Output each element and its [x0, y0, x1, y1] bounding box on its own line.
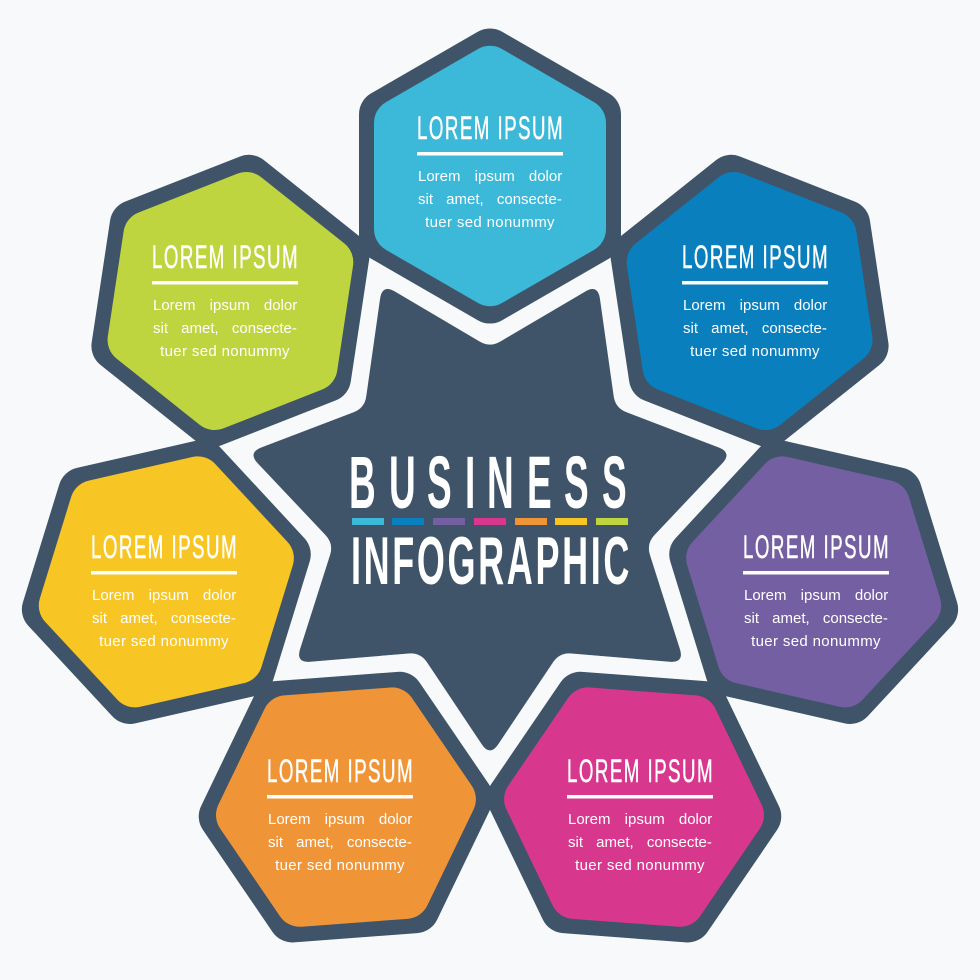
- text: pink panel: [567, 753, 714, 874]
- text: green panel: [152, 239, 299, 360]
- panel: blue hexagon, upper right: [586, 140, 913, 462]
- panel: pink hexagon, lower right: [484, 649, 784, 965]
- central star: [246, 265, 746, 764]
- text: cyan panel: [417, 110, 564, 231]
- text: orange panel: [267, 753, 414, 874]
- text: purple panel: [743, 529, 890, 650]
- text: yellow panel: [91, 529, 238, 650]
- panel: green hexagon, upper left: [67, 140, 394, 462]
- panel: orange hexagon, lower left: [196, 649, 496, 965]
- panel: cyan hexagon, top: [383, 52, 597, 300]
- title line: BUSINESS: BUSINESS: [349, 442, 627, 524]
- panel: purple hexagon, right: [669, 450, 958, 714]
- text: blue panel: [682, 239, 829, 360]
- title line: INFOGRAPHIC: INFOGRAPHIC: [351, 523, 632, 599]
- title: business infographic: [349, 442, 632, 599]
- color bars: [352, 518, 628, 525]
- panel: yellow hexagon, left: [22, 450, 311, 714]
